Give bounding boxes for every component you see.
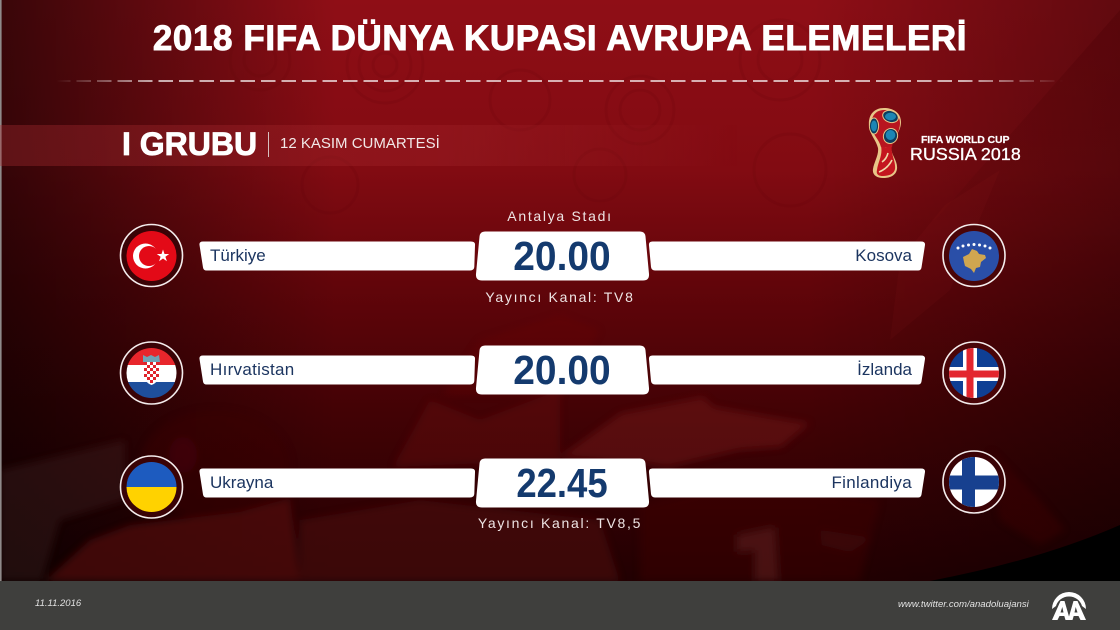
time box — [476, 232, 650, 280]
logo text: FIFA WORLD CUP — [921, 134, 1009, 146]
match: Hırvatistan - İzlanda — [120, 341, 1006, 405]
photo: players — [393, 390, 560, 467]
date: 12 KASIM CUMARTESİ — [280, 135, 440, 152]
flag: Finlandiya — [942, 450, 1006, 514]
flag: Kosova — [942, 224, 1006, 288]
time box — [476, 458, 650, 508]
team name: Hırvatistan: Hırvatistan — [210, 360, 295, 379]
broadcaster: TV8,5: Yayıncı Kanal: TV8,5 — [478, 515, 642, 531]
team name: Kosova: Kosova — [855, 246, 912, 265]
match: Ukrayna - Finlandiya — [120, 450, 1006, 519]
icon: Anadolu Agency logo — [1052, 592, 1086, 620]
team name: Ukrayna: Ukrayna — [210, 473, 273, 492]
team bar: Kosova — [648, 242, 926, 270]
group band — [0, 125, 1120, 166]
logo: FIFA World Cup Russia 2018 — [868, 108, 1021, 178]
team bar: Hırvatistan — [199, 356, 476, 384]
team bar: Finlandiya — [648, 468, 926, 498]
flag: Türkiye — [120, 224, 184, 288]
logo: FIFA World Cup Russia 2018: RUSSIA 2018 — [910, 144, 1021, 164]
time: 20.00 — [513, 347, 611, 393]
footer bar — [0, 581, 1120, 630]
time box — [476, 346, 650, 394]
flag: İzlanda — [942, 341, 1006, 405]
flag: Ukrayna — [120, 455, 184, 519]
match: Türkiye - Kosova — [120, 224, 1006, 288]
team bar: İzlanda — [648, 356, 926, 384]
heading separator — [268, 132, 269, 157]
team bar: Ukrayna — [199, 468, 476, 498]
time: 20.00 — [513, 233, 611, 279]
team name: İzlanda: İzlanda — [857, 360, 912, 379]
broadcaster: TV8: Yayıncı Kanal: TV8 — [485, 289, 635, 305]
team name: Finlandiya: Finlandiya — [832, 473, 912, 492]
time: 22.45 — [516, 460, 608, 506]
group heading: I GRUBU — [122, 126, 257, 162]
footer url: www.twitter.com/anadoluajansi — [898, 599, 1029, 610]
icon: trophy — [868, 108, 901, 178]
team name: Türkiye: Türkiye — [210, 246, 266, 265]
flag: Hırvatistan — [120, 341, 184, 405]
footer date: 11.11.2016 — [35, 598, 81, 609]
team bar: Türkiye — [199, 242, 476, 270]
venue: Antalya Stadı — [507, 208, 613, 224]
title: 2018 FIFA DÜNYA KUPASI AVRUPA ELEMELERİ — [153, 19, 967, 58]
